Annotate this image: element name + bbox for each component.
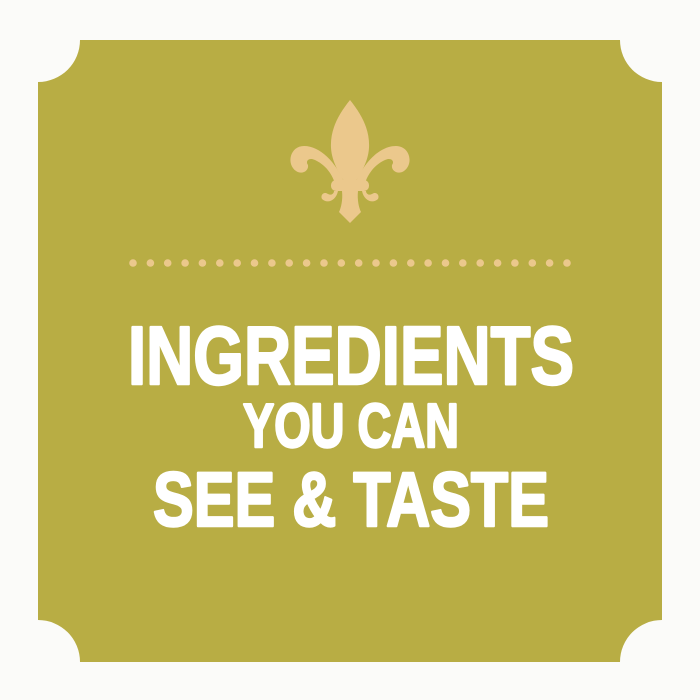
panel: olive notched card <box>38 40 662 662</box>
divider: dotted row <box>129 259 571 267</box>
heading line 2: YOU CAN <box>243 392 459 461</box>
heading line 3: SEE & TASTE <box>153 457 549 543</box>
icon: fleur-de-lis <box>290 100 410 223</box>
heading line 1: INGREDIENTS <box>128 309 574 402</box>
heading: ingredients you can see & taste <box>128 309 574 543</box>
